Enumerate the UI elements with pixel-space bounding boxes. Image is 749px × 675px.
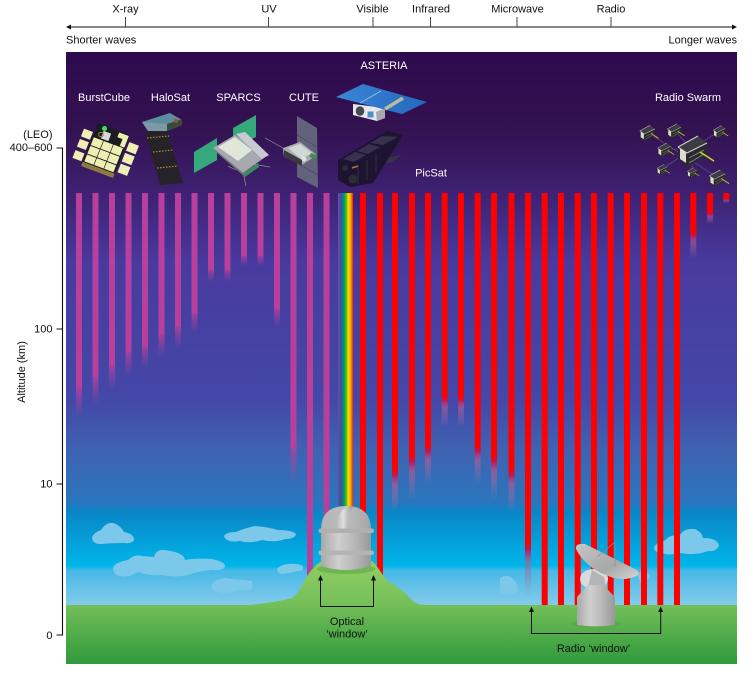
optical window bracket: ‘window’ [326, 628, 368, 640]
spectrum axis: shorter to longer waves: Visible [356, 4, 389, 16]
spectrum axis: shorter to longer waves: Infrared [412, 4, 450, 16]
rainbow bar: visible light [338, 193, 353, 523]
icon: radio telescope dish [572, 542, 638, 628]
optical window bracket: Optical [330, 616, 364, 628]
altitude axis [10, 129, 62, 642]
satellite: CUTE: CUTE [289, 92, 319, 104]
satellite: BurstCube: BurstCube [78, 92, 130, 104]
spectrum axis: shorter to longer waves: X-ray [112, 4, 139, 16]
icon: observatory dome [317, 506, 375, 574]
satellite: HaloSat [142, 92, 190, 185]
satellite: Radio Swarm [640, 92, 729, 187]
altitude axis: 100 [34, 324, 52, 336]
radio window bracket: Radio ‘window’ [557, 643, 630, 655]
spectrum axis: shorter to longer waves: UV [261, 4, 277, 16]
altitude axis: 400–600 [10, 142, 52, 154]
altitude axis: Altitude (km) [16, 341, 28, 403]
sky background [66, 52, 737, 605]
satellite: ASTERIA: ASTERIA [360, 60, 408, 72]
satellite: SPARCS [194, 92, 270, 186]
altitude axis: 0 [46, 630, 52, 642]
ground and hill [66, 561, 737, 664]
red bars: infrared, microwave and radio [360, 193, 729, 606]
spectrum axis: shorter to longer waves [66, 4, 737, 46]
spectrum axis: shorter to longer waves: Longer waves [668, 34, 737, 46]
altitude axis: (LEO) [23, 129, 52, 141]
satellite: PicSat: PicSat [415, 168, 447, 180]
clouds [92, 523, 719, 595]
spectrum axis: shorter to longer waves: Shorter waves [66, 34, 137, 46]
satellite: CUTE [265, 92, 319, 188]
magenta bars: X-ray and UV attenuation [76, 193, 330, 588]
spectrum axis: shorter to longer waves: Radio [597, 4, 625, 16]
radio window bracket [529, 606, 663, 655]
altitude axis: 10 [40, 478, 52, 490]
satellite: Radio Swarm: Radio Swarm [655, 92, 721, 104]
satellite: HaloSat: HaloSat [151, 92, 190, 104]
spectrum axis: shorter to longer waves: Microwave [491, 4, 544, 16]
optical window bracket [318, 575, 376, 640]
satellite: PicSat [338, 131, 447, 187]
satellite: ASTERIA [336, 60, 427, 121]
satellite: SPARCS: SPARCS [216, 92, 261, 104]
satellite: BurstCube [71, 92, 142, 182]
